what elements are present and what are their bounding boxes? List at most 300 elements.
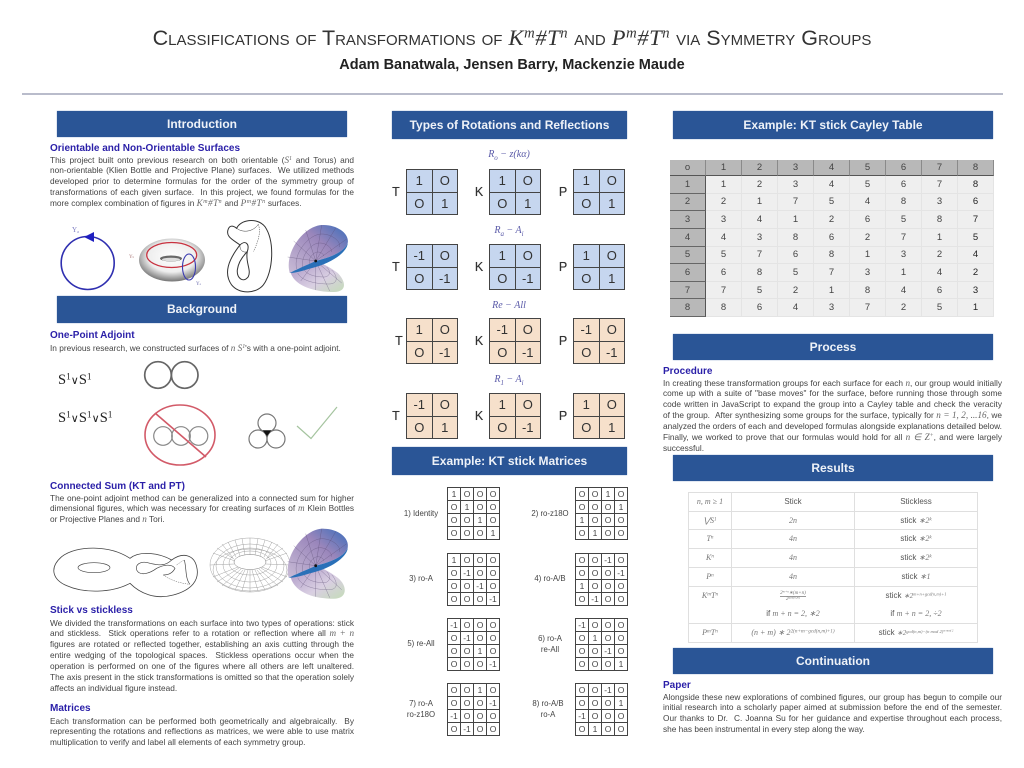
header: Example: KT stick Matrices xyxy=(392,447,627,475)
table: results formulas: 2n xyxy=(789,516,797,524)
matrix: T row 1: O xyxy=(414,196,424,211)
matrix: 1: O xyxy=(490,502,496,512)
table: results formulas: stick ∗1 xyxy=(902,572,930,581)
icon: circle S1 xyxy=(61,226,114,290)
table: results formulas: if m + n = 2, ÷2 xyxy=(890,609,942,618)
table: Cayley table: 5 xyxy=(973,232,978,243)
label: P: P xyxy=(559,334,567,348)
matrix: 8: O xyxy=(579,698,585,708)
text: procedure: Finally, we worked to prove that our formulas would hold for all n ∈ Z+, and were largely xyxy=(663,432,1002,442)
matrix: T row 4: -1 xyxy=(413,397,425,412)
matrix: 2: O xyxy=(618,528,624,538)
table: results formulas: 4n xyxy=(789,534,797,543)
table: Cayley table: 4 xyxy=(829,179,834,190)
table: Cayley table: 7 xyxy=(757,249,762,260)
table: Cayley table: 2 xyxy=(829,214,834,225)
matrix: P row 3: -1 xyxy=(580,322,592,337)
table: Cayley table: 2 xyxy=(973,267,978,278)
matrix: P row 3: -1 xyxy=(606,345,618,360)
matrix: 5: O xyxy=(451,646,457,656)
header: Results xyxy=(673,455,993,481)
matrix: 1: O xyxy=(451,528,457,538)
matrix: 6: O xyxy=(605,633,611,643)
matrix: P row 2: 1 xyxy=(608,271,615,286)
matrix: 1: O xyxy=(451,502,457,512)
table: Cayley table: 6 xyxy=(865,214,870,225)
text: stick vs stickless: The axis present in the stick transformations is omitted so that the operation solely xyxy=(50,672,354,682)
matrix: 1: O xyxy=(464,515,470,525)
table: results formulas: n, m ≥ 1 xyxy=(697,497,723,506)
icon: circle S1: Y xyxy=(72,226,77,234)
table: Cayley table: 4 xyxy=(937,267,942,278)
matrix: 7: O xyxy=(451,685,457,695)
matrix: 7: -1 xyxy=(463,724,471,734)
matrix: K row 2: O xyxy=(497,271,507,286)
matrix: 7 xyxy=(447,683,500,736)
matrix: 8: O xyxy=(579,685,585,695)
icon: circle S1: a xyxy=(77,229,79,234)
matrix: 4: O xyxy=(592,581,598,591)
text: procedure: successful. xyxy=(663,443,704,453)
matrix: 6: O xyxy=(579,646,585,656)
matrix: 1: O xyxy=(477,502,483,512)
table: results formulas: stick ∗2m+n+gcd(n,m)+1 xyxy=(886,591,946,600)
matrix: 3: O xyxy=(490,555,496,565)
matrix: 3: O xyxy=(464,555,470,565)
matrix: 5: O xyxy=(477,659,483,669)
icon: projective plane xyxy=(288,225,348,292)
label: S1 v S1: S1∨S1 xyxy=(58,372,92,388)
matrix: P row 1: 1 xyxy=(583,173,590,188)
text: stick vs stickless: and stickless. Stick operations refer to a rotation or reflection where all m + n xyxy=(50,628,354,638)
matrix: P row 3: O xyxy=(581,345,591,360)
matrix: 5: O xyxy=(464,620,470,630)
heading: Procedure: Procedure xyxy=(663,366,712,377)
table: Cayley table: 4 xyxy=(829,162,834,173)
matrix: 3: O xyxy=(490,568,496,578)
matrix: 3: O xyxy=(477,555,483,565)
caption: Ra Ai: Ra − Ai xyxy=(494,225,524,238)
matrix: K row 3: O xyxy=(497,345,507,360)
text: paper xyxy=(663,692,1002,734)
matrix: 7: O xyxy=(477,724,483,734)
text: intro paragraph xyxy=(50,154,354,208)
matrix: T row 4 xyxy=(406,393,458,439)
matrix: 6: O xyxy=(605,620,611,630)
table: Cayley table: 1 xyxy=(793,214,798,225)
matrix: 6: O xyxy=(579,633,585,643)
header: Introduction xyxy=(57,111,347,137)
table: Cayley table: 3 xyxy=(865,267,870,278)
label: 6) ro-A re-All: 6) ro-A xyxy=(538,634,562,643)
matrix: 6: O xyxy=(618,620,624,630)
matrix: 7: O xyxy=(477,711,483,721)
matrix: P row 2: 1 xyxy=(583,248,590,263)
matrix: P row 1: O xyxy=(581,196,591,211)
matrix: 3: -1 xyxy=(489,594,497,604)
table: Cayley table: 5 xyxy=(757,285,762,296)
label: P: P xyxy=(559,185,567,199)
text: stick vs stickless: operation is performed on one of the figures where all others are left unaltered. xyxy=(50,661,354,671)
text: intro paragraph: developed prior to determine formulas for the order of the symmetry group of xyxy=(50,176,354,186)
matrix: P row 4: O xyxy=(581,420,591,435)
matrix: 7: O xyxy=(451,724,457,734)
text: procedure: of the group. After synthesizing some groups for the surface, typically for n = 1, 2, ...16, we xyxy=(663,410,1002,420)
header: Process: Process xyxy=(810,340,856,354)
header: Continuation: Continuation xyxy=(796,654,870,668)
table: Cayley table: 2 xyxy=(757,162,762,173)
matrix: 4: O xyxy=(592,555,598,565)
heading: Connected Sum: Connected Sum (KT and PT) xyxy=(50,481,185,492)
label: T: T xyxy=(392,260,400,274)
matrix: 3: -1 xyxy=(463,568,471,578)
table: Cayley table: 8 xyxy=(793,232,798,243)
table: results formulas: PmTn xyxy=(702,628,718,637)
matrix: 7: O xyxy=(490,711,496,721)
matrix: K row 1: O xyxy=(523,173,533,188)
icon: torus: Yb xyxy=(129,255,135,260)
matrix: 8: -1 xyxy=(578,711,586,721)
table: Cayley table: 2 xyxy=(901,302,906,313)
header: Background: Background xyxy=(167,302,237,316)
table: Cayley table: 8 xyxy=(721,302,726,313)
matrix: K row 3: O xyxy=(523,322,533,337)
table: results formulas: 2gcd(n,m) xyxy=(786,595,800,602)
table: Cayley table: 1 xyxy=(829,285,834,296)
matrix: T row 2: O xyxy=(414,271,424,286)
table: Cayley table: 7 xyxy=(901,232,906,243)
matrix: 4: O xyxy=(618,581,624,591)
label: 7) ro-A ro-z180: ro-z18O xyxy=(407,710,435,718)
matrix: 2: 1 xyxy=(593,528,597,538)
matrix: 4: O xyxy=(618,594,624,604)
text: stick vs stickless: figures are rotated or reflected together, establishing an axis cutting through the xyxy=(50,639,354,649)
matrix: 8: O xyxy=(618,724,624,734)
heading: Matrices: Matrices xyxy=(50,703,91,714)
matrix: 5: O xyxy=(490,620,496,630)
matrix: 5: O xyxy=(464,659,470,669)
matrix: P row 4: O xyxy=(607,397,617,412)
text: intro paragraph: more complex combination of figures in Km#Tn and Pm#Tn surfaces. xyxy=(50,198,302,208)
table: Cayley table: 8 xyxy=(757,267,762,278)
header: Example: KT stick Cayley Table: Example: KT stick Cayley Table xyxy=(743,118,923,132)
matrix: 4: O xyxy=(579,568,585,578)
table: results formulas: stick ∗2gcd(n,m)−(n mod 2)m mod 2 xyxy=(879,628,953,637)
text: connected sum xyxy=(50,492,354,524)
matrix: P row 2: O xyxy=(607,248,617,263)
table: Cayley table: 4 xyxy=(793,302,798,313)
table: results formulas: stick ∗2k xyxy=(900,553,932,562)
matrix: 2: O xyxy=(618,489,624,499)
icon: torus xyxy=(129,238,205,287)
matrix: 7: -1 xyxy=(489,698,497,708)
matrix: T row 4: O xyxy=(414,420,424,435)
table: Cayley table: 3 xyxy=(829,302,834,313)
matrix: 1: O xyxy=(490,489,496,499)
table: Cayley table: 1 xyxy=(721,179,726,190)
table: Cayley table: 6 xyxy=(793,249,798,260)
matrix: K row 1: 1 xyxy=(499,173,506,188)
matrix: 1: O xyxy=(490,515,496,525)
matrix: 5: -1 xyxy=(463,633,471,643)
heading: One-Point Adjoint: One-Point Adjoint xyxy=(50,330,135,341)
table: Cayley table: 6 xyxy=(937,285,942,296)
table: Cayley table: 5 xyxy=(685,249,690,260)
icon: check mark xyxy=(297,407,337,438)
table: Cayley table: 8 xyxy=(865,285,870,296)
table: Cayley table: o xyxy=(685,162,690,173)
matrix: P row 1: O xyxy=(607,173,617,188)
table: Cayley table: 6 xyxy=(685,267,690,278)
table: results formulas: stick ∗2k xyxy=(900,516,932,524)
table: Cayley table: 5 xyxy=(721,249,726,260)
table: Cayley table: 3 xyxy=(721,214,726,225)
table: results formulas: Stick xyxy=(784,497,802,506)
matrix: 7: O xyxy=(490,685,496,695)
text: intro paragraph: This project built onto previous research on both orientable (S1 and Torus) and xyxy=(50,154,354,164)
table: Cayley table: 6 xyxy=(721,267,726,278)
table: Cayley table: 8 xyxy=(685,302,690,313)
matrix: K row 4: -1 xyxy=(522,420,534,435)
matrix: 5: O xyxy=(477,620,483,630)
matrix: K row 1: O xyxy=(497,196,507,211)
table: results formulas: Stickless xyxy=(900,497,932,506)
matrix: 6: O xyxy=(618,646,624,656)
text: stick vs stickless xyxy=(50,618,354,693)
text: matrices: multiplication to verify and label all elements of each symmetry group. xyxy=(50,737,305,747)
matrix: 5: O xyxy=(477,633,483,643)
icon: torus: Ya xyxy=(196,282,202,287)
matrix: 1: O xyxy=(477,528,483,538)
table: results formulas: (n + m) ∗ 22(n+m−gcd(n,m)+1) xyxy=(751,628,835,637)
label: K: K xyxy=(475,334,483,348)
matrix: 2: O xyxy=(592,489,598,499)
table: results formulas: Pn xyxy=(706,572,714,581)
matrix: 2: O xyxy=(592,502,598,512)
table: Cayley table: 5 xyxy=(901,214,906,225)
table: results formulas: ⋁S1 xyxy=(703,516,717,524)
table: Cayley table xyxy=(670,160,994,317)
label: 1) Identity: 1) Identity xyxy=(404,509,438,518)
matrix: 2: 1 xyxy=(580,515,584,525)
table: Cayley table: 6 xyxy=(757,302,762,313)
table: Cayley table: 3 xyxy=(901,249,906,260)
label: P: P xyxy=(559,260,567,274)
matrix: 6: O xyxy=(592,620,598,630)
caption: R1 Ai: R1 − Ai xyxy=(494,374,524,387)
heading: Paper: Paper xyxy=(663,680,691,691)
table: Cayley table: 6 xyxy=(901,179,906,190)
matrix: 1: O xyxy=(477,489,483,499)
table: Cayley table: 7 xyxy=(721,285,726,296)
text: procedure: come up with a suite of "base moves" for the surface, before running those through some xyxy=(663,388,1002,398)
matrix: 8: O xyxy=(592,711,598,721)
table: Cayley table: 2 xyxy=(685,196,690,207)
matrix: T row 4: 1 xyxy=(441,420,448,435)
matrix: P row 4 xyxy=(573,393,625,439)
table: results formulas: Tn xyxy=(706,534,714,543)
table: Cayley table: 3 xyxy=(757,232,762,243)
matrix: 5: -1 xyxy=(450,620,458,630)
header: Types of Rotations and Reflections: Types of Rotations and Reflections xyxy=(410,118,609,132)
table: results formulas: 2m+n∗(m+n) xyxy=(780,589,806,596)
text: paper: she has been instrumental in every step along the way. xyxy=(663,724,865,734)
matrix: 8: O xyxy=(618,711,624,721)
table: Cayley table: 4 xyxy=(685,232,690,243)
matrix: 6 xyxy=(575,618,628,671)
label: K: K xyxy=(475,185,483,199)
matrix: T row 2: -1 xyxy=(439,271,451,286)
table: Cayley table: 2 xyxy=(721,196,726,207)
label: 8) ro-A/B ro-A xyxy=(532,699,564,718)
table: Cayley table: 5 xyxy=(865,162,870,173)
matrix: 8 xyxy=(575,683,628,736)
matrix: 2: O xyxy=(579,528,585,538)
label: 6) ro-A re-All xyxy=(538,634,562,654)
text: procedure: In creating these transformation groups for each surface for each n, our group would initially xyxy=(663,378,1002,388)
matrix: T row 2: -1 xyxy=(413,248,425,263)
matrix: 5: O xyxy=(490,646,496,656)
table: Cayley table: 7 xyxy=(793,196,798,207)
text: connected sum: or Projective Planes and n Tori. xyxy=(50,514,165,524)
header: Example: KT stick Matrices: Example: KT stick Matrices xyxy=(432,454,587,468)
text: one-point adjoint: In previous research, we constructed surfaces of n S1's with a one-point adjoint. xyxy=(50,342,341,352)
matrix: 7: 1 xyxy=(478,685,482,695)
matrix: 1: O xyxy=(464,489,470,499)
matrix: K row 4: O xyxy=(523,397,533,412)
matrix: K row 3: -1 xyxy=(522,345,534,360)
table: Cayley table: 3 xyxy=(793,179,798,190)
label: 5) re-All: 5) re-All xyxy=(407,639,435,648)
matrix: 6: -1 xyxy=(578,620,586,630)
matrix: 1: O xyxy=(451,515,457,525)
table: Cayley table: 7 xyxy=(685,285,690,296)
matrix: 4: O xyxy=(592,568,598,578)
text: matrices: Each transformation can be performed both geometrically and algebraically. By xyxy=(50,716,354,726)
matrix: K row 2: 1 xyxy=(499,248,506,263)
matrix: T row 4: O xyxy=(440,397,450,412)
text: stick vs stickless: We divided the transformations on each surface into two types of operations: stick xyxy=(50,618,354,628)
table: Cayley table: 2 xyxy=(865,232,870,243)
matrix: P row 4: 1 xyxy=(583,397,590,412)
matrix: 6: O xyxy=(592,659,598,669)
matrix: T row 3: O xyxy=(414,345,424,360)
text: paper: initial research into a scholarly paper aimed at submission before the end of the semester. xyxy=(663,702,1002,712)
caption: Re All: Re − All xyxy=(492,300,526,311)
text: procedure xyxy=(663,378,1002,453)
label: 4) ro-A/B: 4) ro-A/B xyxy=(534,574,566,583)
label: T: T xyxy=(392,409,400,423)
figure: projective plane xyxy=(288,529,348,599)
matrix: 3: O xyxy=(477,568,483,578)
label: K: K xyxy=(475,409,483,423)
header: Process xyxy=(673,334,993,360)
matrix: T row 2 xyxy=(406,244,458,290)
table: Cayley table: 8 xyxy=(937,214,942,225)
matrix: T row 3 xyxy=(406,318,458,364)
matrix: P row 3: O xyxy=(607,322,617,337)
matrix: 7: O xyxy=(464,698,470,708)
label: 6) ro-A re-All: re-All xyxy=(541,644,559,654)
matrix: 8: O xyxy=(618,685,624,695)
matrix: 6: O xyxy=(579,659,585,669)
table: results formulas: 4n xyxy=(789,572,797,581)
matrix: P row 2 xyxy=(573,244,625,290)
matrix: 7: O xyxy=(464,711,470,721)
matrix: 8: 1 xyxy=(619,698,623,708)
matrix: T row 1: 1 xyxy=(416,173,423,188)
matrix: K row 1 xyxy=(489,169,541,215)
matrix: 4: -1 xyxy=(617,568,625,578)
table: Cayley table: 3 xyxy=(937,196,942,207)
matrix: T row 1: 1 xyxy=(441,196,448,211)
matrix: 2: O xyxy=(605,515,611,525)
matrix: 1: 1 xyxy=(452,489,456,499)
matrix: 7: O xyxy=(464,685,470,695)
icon: klein bottle xyxy=(228,220,272,292)
table: Cayley table: 4 xyxy=(973,249,978,260)
matrix: 2: 1 xyxy=(606,489,610,499)
matrix: 1: 1 xyxy=(465,502,469,512)
matrix: 2: O xyxy=(618,515,624,525)
matrix: 4: O xyxy=(579,555,585,565)
matrix: 6: 1 xyxy=(593,633,597,643)
matrix: 3: O xyxy=(477,594,483,604)
table: Cayley table: 5 xyxy=(937,302,942,313)
table: Cayley table: 5 xyxy=(793,267,798,278)
table: Cayley table: 7 xyxy=(973,214,978,225)
matrix: 3 xyxy=(447,553,500,606)
matrix: P row 1 xyxy=(573,169,625,215)
matrix: 5: -1 xyxy=(489,659,497,669)
matrix: K row 3: -1 xyxy=(496,322,508,337)
matrix: 4: O xyxy=(605,594,611,604)
matrix: 8: O xyxy=(592,685,598,695)
matrix: P row 1: 1 xyxy=(608,196,615,211)
table: Cayley table: 8 xyxy=(973,179,978,190)
table: results formulas: 4n xyxy=(789,553,797,562)
table: Cayley table: 3 xyxy=(973,285,978,296)
matrix: 5: 1 xyxy=(478,646,482,656)
matrix: 6: -1 xyxy=(604,646,612,656)
matrix: 7: -1 xyxy=(450,711,458,721)
matrix: 1: 1 xyxy=(491,528,495,538)
text: stick vs stickless: entire wedging of the topological spaces. Stickless operations occur when the xyxy=(50,650,354,660)
matrix: 2: O xyxy=(579,489,585,499)
matrix: K row 2: O xyxy=(523,248,533,263)
icon: S1 v S1 circles xyxy=(145,362,198,388)
matrix: 4: O xyxy=(618,555,624,565)
table: Cayley table: 3 xyxy=(793,162,798,173)
table: Cayley table: 2 xyxy=(793,285,798,296)
matrix: 3: 1 xyxy=(452,555,456,565)
matrix: 7: O xyxy=(477,698,483,708)
text: intro paragraph: transformations of each given surface. In this project, we found formulas for the xyxy=(50,187,354,197)
matrix: 1 xyxy=(447,487,500,540)
matrix: K row 2 xyxy=(489,244,541,290)
text: matrices: representing the rotations and reflections as matrices, we were able to use matrix xyxy=(50,726,354,736)
table: Cayley table: 1 xyxy=(865,249,870,260)
matrix: K row 4: 1 xyxy=(499,397,506,412)
table: Cayley table: 1 xyxy=(937,232,942,243)
heading: Orientable and Non-Orientable Surfaces: Orientable and Non-Orientable Surfaces xyxy=(50,143,240,154)
table: results formulas xyxy=(688,492,978,643)
header: Continuation xyxy=(673,648,993,674)
table: Cayley table: 5 xyxy=(829,196,834,207)
matrix: K row 2: -1 xyxy=(522,271,534,286)
label: T: T xyxy=(395,334,403,348)
figure: double torus klein bottle xyxy=(54,548,197,597)
